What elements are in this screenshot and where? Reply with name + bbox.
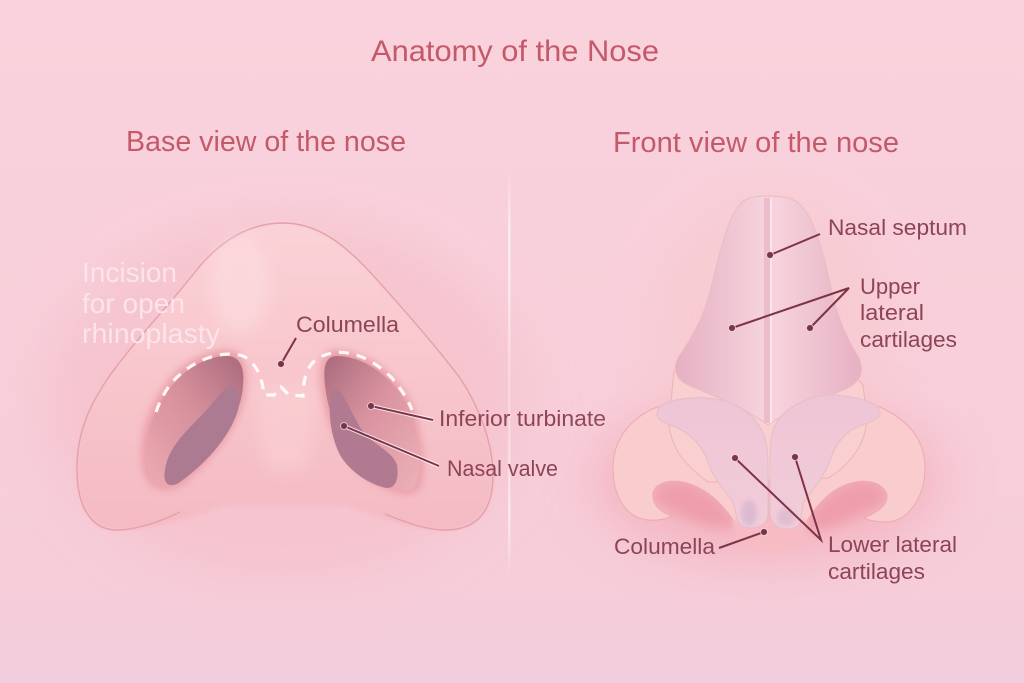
label: columella [614, 528, 768, 559]
title: Anatomy of the Nose [371, 35, 659, 68]
halo around base nose [45, 220, 525, 580]
nostril rim shadow [320, 350, 424, 494]
divider [508, 170, 510, 578]
label: inferior turbinate [368, 402, 606, 431]
left nostril [141, 350, 246, 490]
right cartilage dome shading [777, 508, 795, 526]
right nostril [320, 350, 424, 494]
illustration: base view of the nose [45, 220, 606, 580]
turbinate [330, 387, 398, 488]
label: upper lateral cartilages: lateral [860, 300, 924, 325]
side cartilage backing [669, 370, 867, 482]
right ala [775, 400, 925, 530]
turbinate [164, 385, 239, 485]
tip skin below cartilages [732, 520, 808, 552]
left nostril shadow [652, 481, 738, 528]
left lower lateral cartilage [657, 398, 768, 528]
label: nasal septum [766, 215, 967, 258]
label: nasal valve: Nasal valve [447, 456, 558, 481]
label: upper lateral cartilages [728, 274, 957, 352]
label: lower lateral cartilages: Lower lateral [828, 532, 957, 557]
label: nasal septum: Nasal septum [828, 215, 967, 240]
label: incision: for open [82, 288, 185, 319]
halo around front nose [593, 400, 943, 560]
nose outline [77, 223, 493, 530]
left cartilage dome shading [741, 500, 757, 526]
highlight on the tip [210, 235, 270, 335]
nostril cavity [146, 356, 243, 486]
label: incision: Incision [82, 257, 177, 288]
label: upper lateral cartilages: Upper [860, 274, 920, 299]
illustration: front view of the nose [593, 190, 967, 584]
label: incision: rhinoplasty [82, 318, 220, 349]
dashed incision line [156, 352, 412, 412]
label: columella: Columella [296, 312, 400, 337]
nostril rim shadow [141, 350, 246, 490]
label: incision [82, 257, 220, 349]
label: inferior turbinate: Inferior turbinate [439, 406, 606, 431]
nose body fill [77, 223, 493, 530]
upper lateral cartilages and septum [675, 196, 861, 425]
right nostril shadow [802, 481, 888, 529]
right lower lateral cartilage [770, 395, 880, 529]
columella [252, 385, 320, 470]
label: columella: Columella [614, 534, 716, 559]
nasal septum strip [764, 198, 770, 423]
nostril cavity [324, 356, 419, 490]
left ala [613, 400, 760, 528]
label: nasal valve [340, 422, 558, 481]
label: upper lateral cartilages: cartilages [860, 327, 957, 352]
label: columella [278, 312, 400, 368]
upper lateral cartilage [675, 196, 861, 425]
heading: base view: Base view of the nose [126, 126, 406, 158]
label: lower lateral cartilages: cartilages [828, 559, 925, 584]
heading: front view: Front view of the nose [613, 127, 899, 159]
label: lower lateral cartilages [732, 454, 957, 584]
